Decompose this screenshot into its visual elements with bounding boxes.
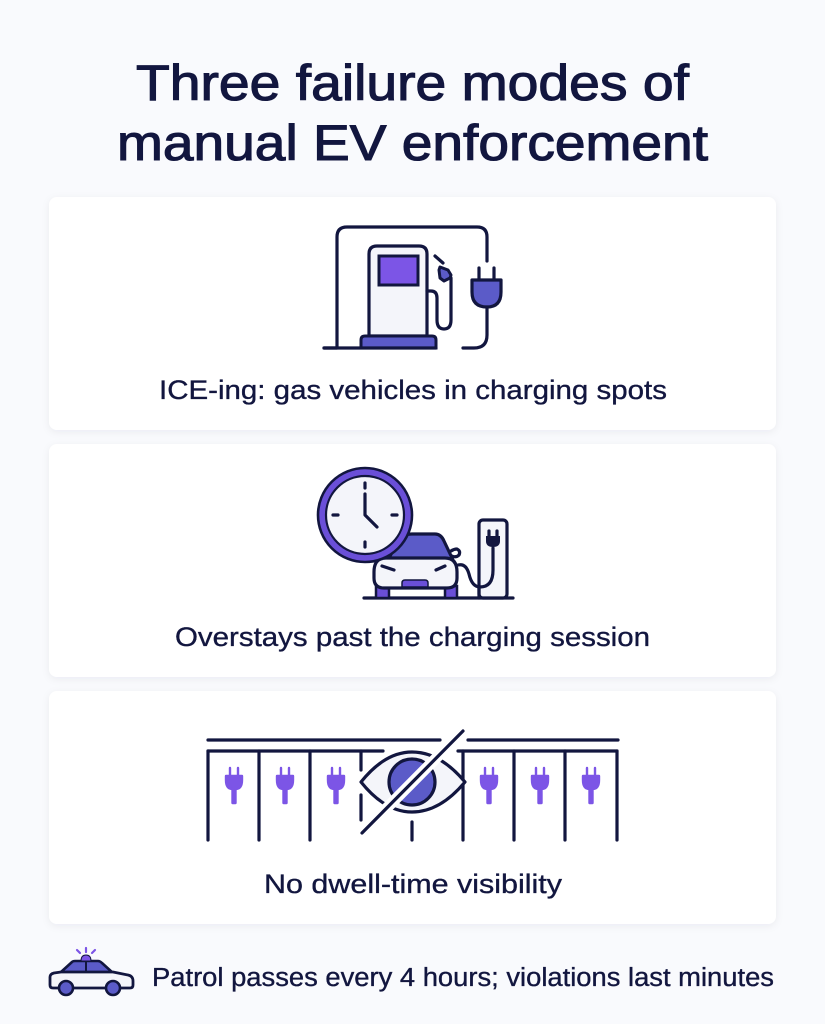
icon: gas pump with plug xyxy=(324,227,501,348)
title: Three failure modes of xyxy=(136,55,689,111)
footer note xyxy=(50,948,774,995)
label: visibility: No dwell-time visibility xyxy=(264,869,563,899)
plugs xyxy=(226,768,599,803)
patrol text: Patrol passes every 4 hours; violations last minutes xyxy=(152,964,774,992)
icon: patrol car xyxy=(50,948,133,995)
label: ICE-ing: ICE-ing: gas vehicles in charging spots xyxy=(159,375,667,405)
title: manual EV enforcement xyxy=(117,115,708,171)
panel: ICE-ing xyxy=(49,197,776,430)
title xyxy=(117,55,708,171)
icon: clock, car and charger xyxy=(317,467,513,598)
icon: charging bays with crossed-out eye xyxy=(208,728,618,840)
panel: visibility xyxy=(49,691,776,924)
panel: overstays xyxy=(49,444,776,677)
label: overstays: Overstays past the charging session xyxy=(175,622,650,652)
